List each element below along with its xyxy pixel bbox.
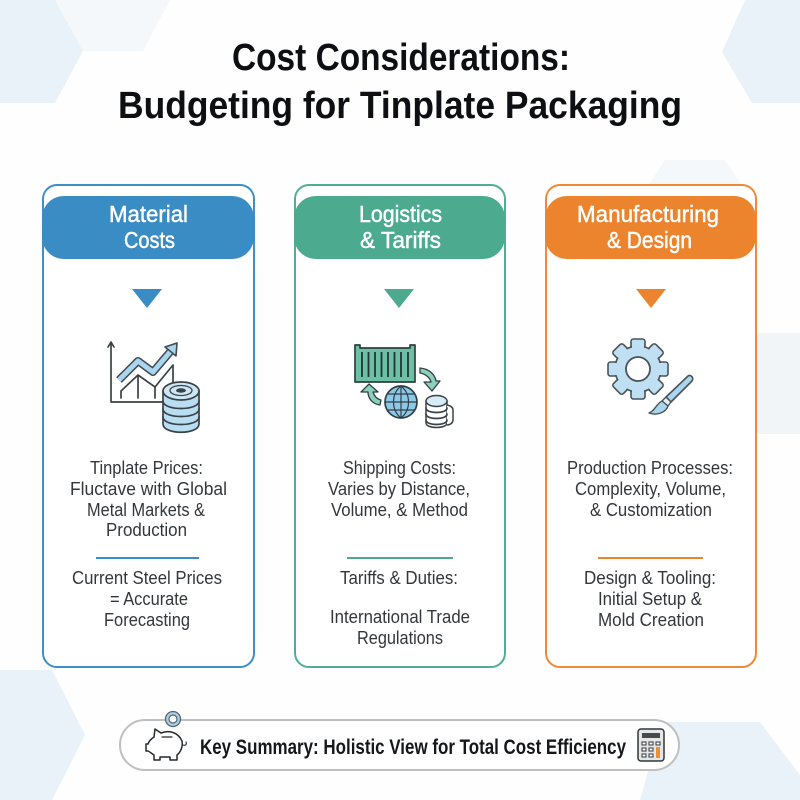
text: tariffs and duties: Regulations bbox=[357, 627, 443, 648]
header: material costs: Costs bbox=[124, 227, 175, 253]
text: design and tooling: Design & Tooling: bbox=[584, 567, 716, 588]
arrow: material costs bbox=[132, 289, 162, 308]
header: logistics and tariffs: Logistics bbox=[359, 201, 442, 227]
panel: key summary bbox=[120, 712, 679, 770]
header: manufacturing and design: & Design bbox=[607, 227, 692, 253]
text: tariffs and duties: International Trade bbox=[330, 606, 470, 627]
text: tinplate prices bbox=[70, 457, 227, 540]
text: design and tooling bbox=[584, 567, 716, 630]
panel: manufacturing and design bbox=[545, 185, 756, 667]
text: tinplate prices: Fluctave with Global bbox=[70, 478, 227, 499]
icon: container, globe and coins bbox=[355, 345, 453, 428]
panel: logistics and tariffs bbox=[294, 185, 505, 667]
text: steel prices: Current Steel Prices bbox=[72, 567, 222, 588]
text: steel prices bbox=[72, 567, 222, 630]
header: material costs: Material bbox=[109, 201, 188, 227]
text: production processes: Production Processes: bbox=[567, 457, 733, 478]
text: tinplate prices: Production bbox=[106, 519, 187, 540]
arrow: logistics and tariffs bbox=[384, 289, 414, 308]
icon: piggy bank bbox=[146, 729, 186, 760]
header: logistics and tariffs bbox=[294, 196, 505, 259]
arrow: manufacturing and design bbox=[636, 289, 666, 308]
icon: chart and coin stack bbox=[108, 342, 199, 432]
icon: gear and paintbrush bbox=[608, 339, 693, 414]
text: tinplate prices: Metal Markets & bbox=[87, 499, 206, 520]
text: key summary: Key Summary: Holistic View for Total Cost Efficiency bbox=[200, 736, 626, 759]
text: design and tooling: Mold Creation bbox=[598, 609, 704, 630]
text: shipping costs bbox=[328, 457, 470, 520]
title: Budgeting for Tinplate Packaging bbox=[118, 85, 682, 127]
header: material costs bbox=[42, 196, 254, 259]
text: steel prices: Forecasting bbox=[104, 609, 190, 630]
icon: coin bbox=[166, 712, 180, 726]
text: production processes bbox=[567, 457, 733, 520]
header: manufacturing and design: Manufacturing bbox=[577, 201, 719, 227]
header: manufacturing and design bbox=[545, 196, 756, 259]
text: tinplate prices: Tinplate Prices: bbox=[90, 457, 203, 478]
text: shipping costs: Varies by Distance, bbox=[328, 478, 470, 499]
text: production processes: Complexity, Volume, bbox=[575, 478, 726, 499]
title bbox=[118, 37, 682, 127]
text: steel prices: = Accurate bbox=[110, 588, 188, 609]
panel: material costs bbox=[42, 185, 254, 667]
title: Cost Considerations: bbox=[232, 37, 570, 79]
header: logistics and tariffs: & Tariffs bbox=[360, 227, 441, 253]
text: design and tooling: Initial Setup & bbox=[598, 588, 703, 609]
text: tariffs and duties: Tariffs & Duties: bbox=[340, 567, 458, 588]
text: shipping costs: Volume, & Method bbox=[331, 499, 468, 520]
text: production processes: & Customization bbox=[590, 499, 712, 520]
icon: calculator bbox=[638, 729, 664, 761]
text: shipping costs: Shipping Costs: bbox=[343, 457, 456, 478]
text: tariffs and duties bbox=[330, 567, 470, 648]
